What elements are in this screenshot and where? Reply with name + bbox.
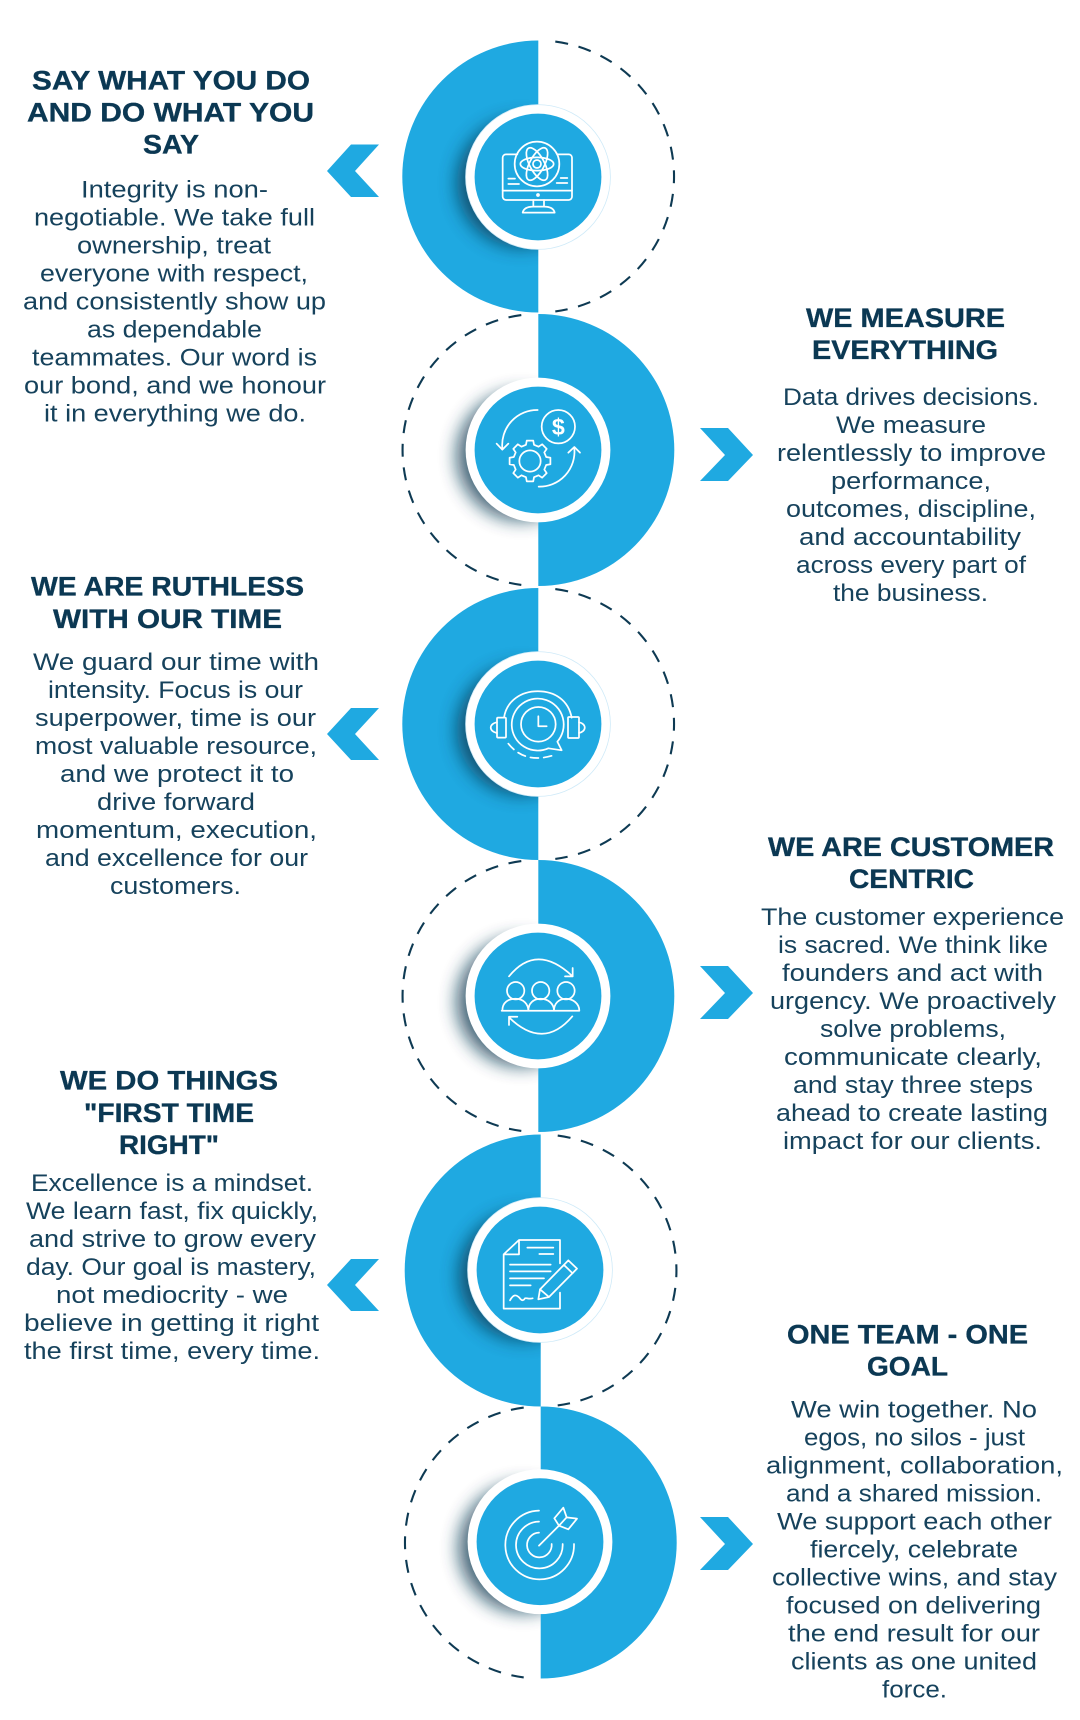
- heading: first time right: WE DO THINGS: [60, 1065, 278, 1095]
- body: integrity: [23, 177, 326, 428]
- body: win together: fiercely, celebrate: [810, 1536, 1018, 1563]
- arrow: chevron left 3: [327, 708, 379, 760]
- body: excellence: day. Our goal is mastery,: [26, 1254, 316, 1281]
- body: customer experience: ahead to create lasting: [776, 1100, 1048, 1127]
- body: data drives decisions: and accountability: [799, 524, 1021, 551]
- icon: document with pencil: [504, 1240, 577, 1309]
- icon: team cycle: [502, 959, 579, 1034]
- heading: we measure everything: [806, 303, 1005, 365]
- heading: say what you do: AND DO WHAT YOU: [27, 98, 314, 128]
- heading: we measure everything: EVERYTHING: [812, 335, 998, 365]
- body: integrity: everyone with respect,: [40, 261, 308, 288]
- body: win together: clients as one united: [791, 1648, 1037, 1675]
- body: win together: collective wins, and stay: [772, 1564, 1057, 1591]
- body: integrity: as dependable: [87, 317, 262, 344]
- text block 6: [766, 1319, 1063, 1703]
- body: integrity: it in everything we do.: [44, 401, 306, 428]
- arrow: chevron right 4: [700, 966, 753, 1019]
- body: win together: We win together. No: [791, 1396, 1037, 1423]
- body: integrity: and consistently show up: [23, 289, 326, 316]
- body: guard our time: and we protect it to: [60, 761, 294, 788]
- body: guard our time: and excellence for our: [45, 845, 308, 872]
- text block 4: [761, 832, 1064, 1155]
- text block 5: [24, 1065, 320, 1365]
- body: customer experience: impact for our clients.: [783, 1128, 1042, 1155]
- body: guard our time: customers.: [110, 873, 241, 900]
- circle node 5: [405, 1134, 676, 1406]
- body: excellence: [24, 1170, 320, 1365]
- heading: first time right: RIGHT": [119, 1130, 219, 1160]
- body: data drives decisions: [777, 384, 1046, 607]
- body: data drives decisions: Data drives decisions.: [783, 384, 1039, 411]
- heading: customer centric: [768, 832, 1054, 894]
- heading: say what you do: [27, 65, 314, 160]
- body: customer experience: solve problems,: [820, 1016, 1006, 1043]
- text block 2: [777, 303, 1046, 607]
- heading: say what you do: SAY WHAT YOU DO: [32, 65, 310, 95]
- body: excellence: the first time, every time.: [24, 1338, 320, 1365]
- body: excellence: We learn fast, fix quickly,: [26, 1198, 318, 1225]
- body: win together: focused on delivering: [786, 1592, 1041, 1619]
- arrow: chevron right 6: [700, 1517, 753, 1570]
- heading: ruthless with time: [31, 572, 304, 634]
- body: guard our time: [33, 649, 319, 900]
- circle node 4: [403, 860, 674, 1132]
- body: customer experience: is sacred. We think like: [778, 932, 1048, 959]
- arrow: chevron right 2: [700, 428, 753, 481]
- body: win together: egos, no silos - just: [804, 1424, 1025, 1451]
- body: guard our time: momentum, execution,: [36, 817, 317, 844]
- body: customer experience: communicate clearly,: [784, 1044, 1042, 1071]
- body: integrity: teammates. Our word is: [32, 345, 317, 372]
- heading: customer centric: WE ARE CUSTOMER: [768, 832, 1054, 862]
- circle node 6: [405, 1406, 677, 1678]
- body: guard our time: We guard our time with: [33, 649, 319, 676]
- body: data drives decisions: We measure: [836, 412, 986, 439]
- body: win together: force.: [882, 1676, 947, 1703]
- heading: say what you do: SAY: [143, 130, 199, 160]
- body: integrity: ownership, treat: [77, 233, 271, 260]
- circle node 2: [403, 314, 674, 586]
- heading: first time right: [60, 1065, 278, 1160]
- body: customer experience: founders and act with: [782, 960, 1043, 987]
- heading: one team one goal: ONE TEAM - ONE: [787, 1319, 1028, 1349]
- heading: we measure everything: WE MEASURE: [806, 303, 1005, 333]
- text block 3: [31, 572, 319, 900]
- body: data drives decisions: performance,: [831, 468, 991, 495]
- circle node 3: [402, 588, 674, 860]
- circle node 1: [402, 40, 674, 312]
- body: data drives decisions: across every part of: [796, 552, 1026, 579]
- icon: target with arrow: [505, 1508, 577, 1579]
- body: data drives decisions: the business.: [833, 580, 988, 607]
- heading: first time right: "FIRST TIME: [84, 1098, 254, 1128]
- icon: gear and dollar cycle: [497, 410, 580, 487]
- body: customer experience: [761, 904, 1064, 1155]
- heading: one team one goal: GOAL: [867, 1352, 948, 1382]
- body: guard our time: superpower, time is our: [35, 705, 316, 732]
- body: integrity: Integrity is non-: [81, 177, 268, 204]
- body: guard our time: most valuable resource,: [35, 733, 317, 760]
- body: excellence: not mediocrity - we: [56, 1282, 288, 1309]
- heading: one team one goal: [787, 1319, 1028, 1382]
- body: win together: and a shared mission.: [786, 1480, 1042, 1507]
- body: data drives decisions: outcomes, discipline,: [786, 496, 1036, 523]
- body: excellence: believe in getting it right: [24, 1310, 319, 1337]
- icon: monitor with atom: [503, 142, 572, 213]
- body: win together: [766, 1396, 1063, 1703]
- heading: customer centric: CENTRIC: [849, 864, 974, 894]
- text block 1: [23, 65, 326, 428]
- arrow: chevron left 1: [327, 144, 379, 197]
- icon: clock speech bubble with headset: [491, 691, 585, 758]
- body: excellence: Excellence is a mindset.: [31, 1170, 313, 1197]
- body: win together: alignment, collaboration,: [766, 1452, 1063, 1479]
- heading: ruthless with time: WE ARE RUTHLESS: [31, 572, 304, 602]
- body: data drives decisions: relentlessly to improve: [777, 440, 1046, 467]
- body: customer experience: The customer experience: [761, 904, 1064, 931]
- body: customer experience: and stay three steps: [793, 1072, 1033, 1099]
- body: excellence: and strive to grow every: [29, 1226, 316, 1253]
- body: integrity: negotiable. We take full: [34, 205, 315, 232]
- body: guard our time: intensity. Focus is our: [48, 677, 303, 704]
- body: guard our time: drive forward: [97, 789, 255, 816]
- body: win together: the end result for our: [788, 1620, 1040, 1647]
- body: customer experience: urgency. We proactively: [770, 988, 1056, 1015]
- icon: gear and dollar cycle: $: [552, 414, 565, 440]
- heading: ruthless with time: WITH OUR TIME: [53, 604, 282, 634]
- body: win together: We support each other: [777, 1508, 1052, 1535]
- body: integrity: our bond, and we honour: [24, 373, 326, 400]
- arrow: chevron left 5: [327, 1259, 379, 1311]
